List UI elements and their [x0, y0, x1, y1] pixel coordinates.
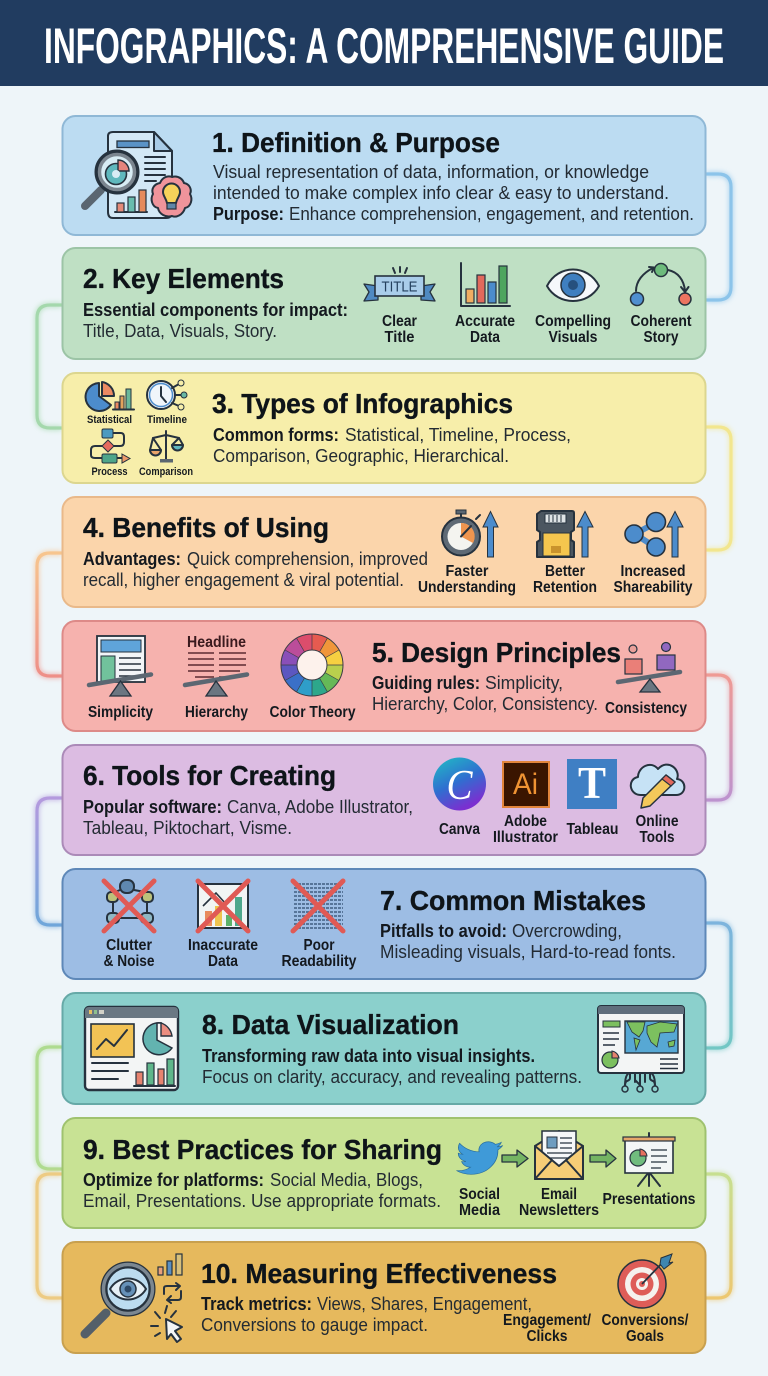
panel 9: best practices — [62, 1118, 706, 1228]
panel 6: tools — [62, 745, 706, 855]
body text: Conversions to gauge impact. — [201, 1314, 428, 1335]
body text: Statistical, Timeline, Process, — [345, 424, 571, 445]
icon: dashboard — [85, 1007, 178, 1090]
labels: Story — [644, 329, 679, 346]
labels: Tools — [640, 829, 675, 846]
labels: Consistency — [605, 700, 687, 717]
heading: 3. Types of Infographics — [212, 388, 513, 419]
panel 8: data visualization — [62, 993, 706, 1104]
icon: Adobe Illustrator logo: Ai — [513, 768, 538, 801]
labels — [503, 1312, 689, 1345]
header band — [0, 0, 768, 86]
labels: Understanding — [418, 579, 516, 596]
labels: Shareability — [614, 579, 693, 596]
icon: title banner — [364, 267, 435, 301]
panel 10: measuring effectiveness — [62, 1242, 706, 1353]
labels: Illustrator — [493, 829, 558, 846]
labels: Poor — [304, 937, 334, 954]
heading: 2. Key Elements — [83, 263, 284, 294]
icon: metric bars — [158, 1254, 182, 1275]
icon: statistical — [86, 382, 134, 411]
panel 3: types of infographics — [62, 373, 706, 483]
icon: simplicity — [89, 636, 151, 696]
icon: bar chart — [461, 263, 510, 306]
heading: 6. Tools for Creating — [83, 760, 336, 791]
body text: Hierarchy, Color, Consistency. — [372, 693, 598, 714]
body text: Common forms: — [213, 424, 339, 445]
body text — [201, 1293, 532, 1335]
icon: target with arrow — [618, 1254, 673, 1308]
body text — [372, 672, 598, 714]
labels: Conversions/ — [602, 1312, 689, 1329]
icon: eye — [547, 270, 599, 301]
labels: Coherent — [630, 313, 692, 330]
panel 1: definition and purpose — [62, 116, 706, 235]
icon: share and arrow — [625, 512, 683, 557]
body text: Tableau, Piktochart, Visme. — [83, 817, 292, 838]
icon: bird — [456, 1142, 503, 1174]
panel 4: benefits — [62, 497, 706, 607]
body text — [83, 299, 348, 341]
body text: Track metrics: — [201, 1293, 312, 1314]
small labels: Process — [92, 466, 128, 478]
connectors between panels — [37, 174, 731, 1298]
heading: 8. Data Visualization — [202, 1009, 459, 1040]
body text: Purpose: — [213, 203, 284, 224]
panel 2: key elements — [62, 248, 706, 359]
body text: Title, Data, Visuals, Story. — [83, 320, 277, 341]
labels — [418, 563, 693, 596]
labels: Tableau — [566, 821, 618, 838]
body text: Advantages: — [83, 548, 181, 569]
labels: Compelling — [535, 313, 611, 330]
icon: email newsletter — [535, 1131, 583, 1179]
arrow: social to email — [502, 1150, 528, 1167]
labels: Presentations — [602, 1191, 696, 1208]
body text: Overcrowding, — [512, 920, 622, 941]
heading: 1. Definition & Purpose — [212, 127, 500, 158]
labels: Increased — [620, 563, 686, 580]
labels: Media — [459, 1202, 500, 1219]
labels — [88, 700, 687, 721]
body text — [380, 920, 676, 962]
icon: comparison scales — [150, 431, 183, 462]
icon: title banner: TITLE — [382, 280, 418, 296]
icon: consistency balance — [618, 642, 680, 692]
body text: Visual representation of data, information, or knowledge — [213, 161, 649, 182]
labels: Goals — [626, 1328, 664, 1345]
labels: Clear — [382, 313, 417, 330]
body text: Comparison, Geographic, Hierarchical. — [213, 445, 509, 466]
icon: hierarchy: Headline — [187, 634, 246, 651]
labels: Retention — [533, 579, 597, 596]
body text: Essential components for impact: — [83, 299, 348, 320]
icon: share loop — [164, 1283, 181, 1303]
labels: Social — [459, 1186, 500, 1203]
labels: & Noise — [104, 953, 155, 970]
body text: intended to make complex info clear & easy to understand. — [213, 182, 669, 203]
icon: hierarchy — [185, 634, 247, 696]
body text: Focus on clarity, accuracy, and revealing patterns. — [202, 1066, 582, 1087]
icon: cursor click — [151, 1306, 182, 1342]
labels: Title — [384, 329, 415, 346]
heading: 9. Best Practices for Sharing — [83, 1134, 442, 1165]
icon: colour wheel — [281, 634, 343, 696]
body text: Simplicity, — [485, 672, 563, 693]
body text: recall, higher engagement & viral potential. — [83, 569, 404, 590]
body text — [213, 161, 694, 224]
small labels — [87, 414, 193, 478]
body text — [83, 1169, 441, 1211]
labels: Better — [545, 563, 585, 580]
icon: world map dashboard — [598, 1006, 684, 1092]
body text: Guiding rules: — [372, 672, 480, 693]
labels: Canva — [439, 821, 480, 838]
body text — [83, 548, 428, 590]
labels: Clicks — [526, 1328, 568, 1345]
body text: Enhance comprehension, engagement, and retention. — [289, 203, 694, 224]
labels: Data — [470, 329, 500, 346]
labels: Simplicity — [88, 704, 153, 721]
labels: Accurate — [455, 313, 515, 330]
body text: Optimize for platforms: — [83, 1169, 264, 1190]
heading: 4. Benefits of Using — [83, 512, 329, 543]
labels: Newsletters — [519, 1202, 599, 1219]
small labels: Comparison — [139, 466, 193, 478]
arrow: email to presentations — [590, 1150, 616, 1167]
body text: Popular software: — [83, 796, 222, 817]
labels — [104, 937, 357, 970]
icon: Tableau logo: T — [578, 757, 606, 808]
labels — [382, 313, 692, 346]
labels: Online — [636, 813, 679, 830]
body text: Social Media, Blogs, — [270, 1169, 423, 1190]
labels: Email — [541, 1186, 577, 1203]
icon: inaccurate data crossed out — [198, 881, 248, 931]
icon: Canva logo — [433, 758, 486, 810]
heading: 10. Measuring Effectiveness — [201, 1258, 557, 1289]
labels: Inaccurate — [188, 937, 258, 954]
body text: Email, Presentations. Use appropriate formats. — [83, 1190, 441, 1211]
labels: Faster — [446, 563, 488, 580]
icon: timeline clock — [147, 380, 187, 410]
icon: magnifier with eye — [85, 1264, 152, 1334]
labels: Adobe — [504, 813, 547, 830]
labels: Visuals — [548, 329, 598, 346]
icon: document, magnifier and brain — [85, 132, 191, 218]
body text — [202, 1045, 582, 1087]
body text — [83, 796, 413, 838]
body text: Transforming raw data into visual insights. — [202, 1045, 535, 1066]
labels: Readability — [282, 953, 357, 970]
body text: Pitfalls to avoid: — [380, 920, 507, 941]
small labels: Statistical — [87, 414, 132, 426]
body text: Views, Shares, Engagement, — [317, 1293, 532, 1314]
labels: Color Theory — [270, 704, 356, 721]
icon: Tableau logo — [567, 757, 617, 809]
heading: 5. Design Principles — [372, 637, 621, 668]
labels — [459, 1186, 696, 1219]
icon: cloud and pencil — [631, 765, 684, 808]
body text: Quick comprehension, improved — [187, 548, 428, 569]
icon: poor readability crossed out — [293, 881, 343, 931]
icon: presentation board — [623, 1133, 675, 1186]
icon: process flow — [91, 429, 130, 463]
icon: Adobe Illustrator logo — [503, 762, 549, 807]
heading: 7. Common Mistakes — [380, 885, 646, 916]
body text — [213, 424, 571, 466]
icon: memory card and arrow — [537, 511, 593, 557]
icon: stopwatch and arrow — [442, 510, 498, 557]
icon: clutter crossed out — [104, 880, 154, 931]
labels: Clutter — [106, 937, 152, 954]
body text: Canva, Adobe Illustrator, — [227, 796, 413, 817]
panel 7: common mistakes — [62, 869, 706, 979]
body text: Misleading visuals, Hard-to-read fonts. — [380, 941, 676, 962]
labels: Engagement/ — [503, 1312, 591, 1329]
panel 5: design principles — [62, 621, 706, 731]
small labels: Timeline — [147, 414, 187, 426]
icon: story path — [630, 264, 691, 306]
labels: Hierarchy — [185, 704, 248, 721]
labels: Data — [208, 953, 238, 970]
icon: Canva logo: C — [446, 763, 473, 809]
labels — [439, 813, 679, 846]
